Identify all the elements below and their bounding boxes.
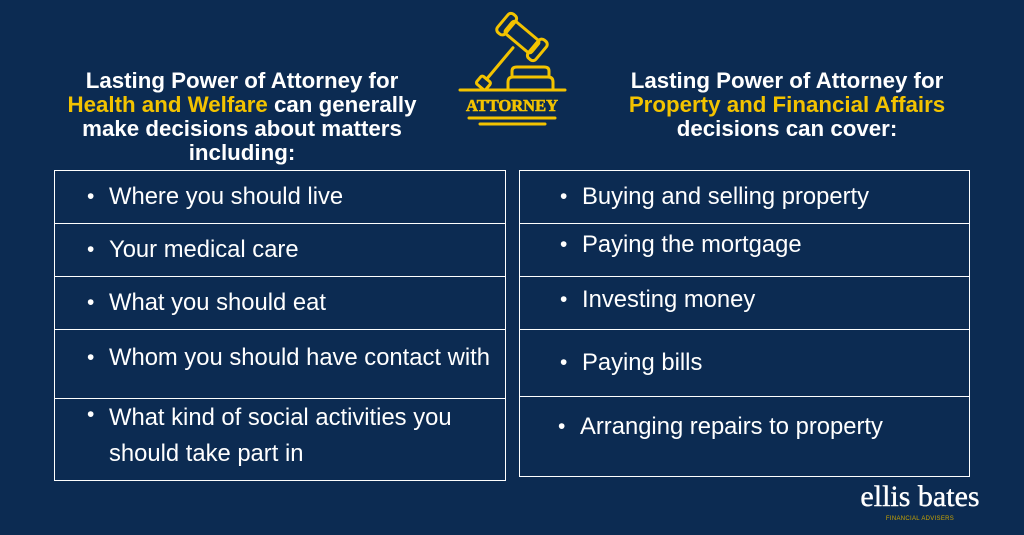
item: Paying the mortgage (582, 231, 802, 258)
heading: health and welfare: Lasting Power of Attorney for (86, 68, 398, 93)
item: • (560, 185, 567, 208)
item: What kind of social activities you (109, 404, 452, 431)
item: • (87, 291, 94, 314)
item: Investing money (582, 286, 755, 313)
item (55, 223, 505, 276)
logo: ellis bates: ellis bates (860, 480, 980, 513)
item (520, 223, 969, 276)
item: Whom you should have contact with (109, 344, 490, 371)
icon: gavel attorney (458, 12, 566, 126)
panel: health and welfare list (54, 170, 506, 481)
item: Where you should live (109, 183, 343, 210)
item: • (560, 233, 567, 256)
item (55, 276, 505, 329)
heading: property and financial: Property and Financial Affairs (629, 92, 945, 117)
item (55, 329, 505, 398)
item (520, 276, 969, 329)
item (520, 396, 969, 476)
icon: gavel attorney: ATTORNEY (466, 96, 558, 115)
item: What you should eat (109, 289, 326, 316)
item: Your medical care (109, 236, 299, 263)
item: should take part in (109, 440, 303, 467)
heading: property and financial: Lasting Power of Attorney for (631, 68, 943, 93)
item (520, 329, 969, 396)
item: • (87, 346, 94, 369)
item: • (558, 414, 565, 438)
heading: property and financial: decisions can cover: (677, 116, 897, 141)
item: Paying bills (582, 349, 702, 376)
heading: health and welfare: make decisions about matters (82, 116, 402, 141)
item: • (560, 351, 567, 374)
item: • (87, 185, 94, 208)
item: Arranging repairs to property (580, 412, 883, 440)
logo: ellis bates: FINANCIAL ADVISERS (886, 516, 954, 522)
item: • (560, 288, 567, 311)
item: Buying and selling property (582, 183, 869, 210)
heading: property and financial (629, 68, 945, 141)
heading: health and welfare (67, 68, 417, 165)
heading: health and welfare: Health and Welfare can generally (67, 92, 417, 117)
item: • (87, 238, 94, 261)
item (55, 398, 505, 480)
panel: property and financial list (519, 170, 970, 477)
item: • (87, 403, 94, 426)
heading: health and welfare: including: (189, 140, 295, 165)
